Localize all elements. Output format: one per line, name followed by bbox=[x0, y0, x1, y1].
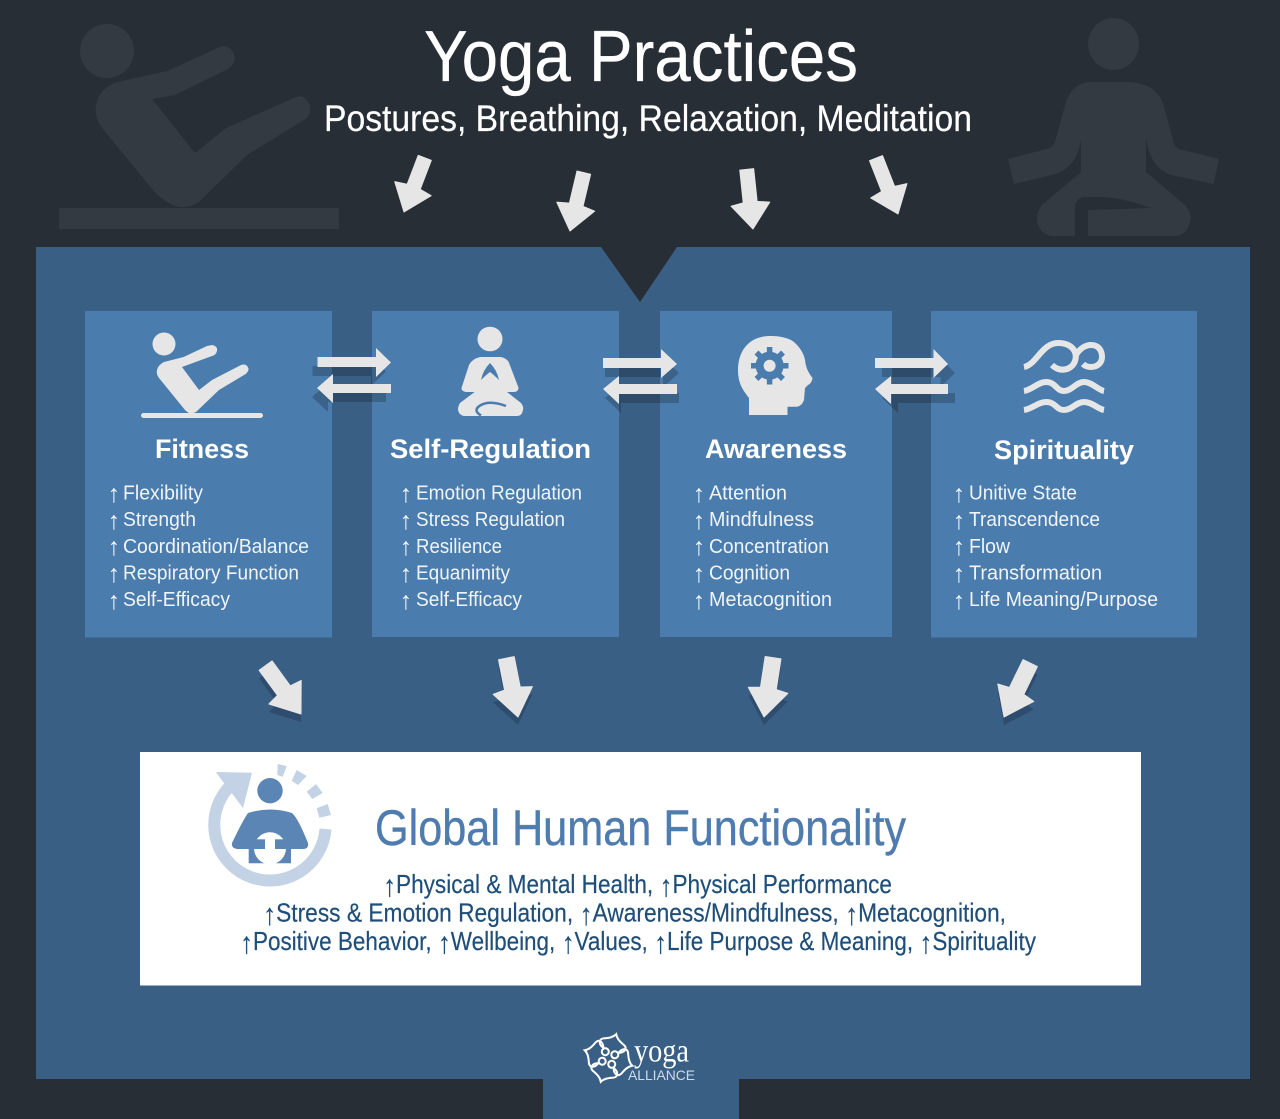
list: Awareness outcomes: ↑ bbox=[693, 507, 705, 535]
heading: Self-Regulation: Self-Regulation bbox=[390, 434, 591, 464]
title: Yoga Practices bbox=[424, 17, 858, 97]
list: Self-Regulation outcomes: ↑ bbox=[400, 533, 412, 561]
list: Spirituality outcomes: Transcendence bbox=[969, 509, 1100, 531]
list: Awareness outcomes: Cognition bbox=[709, 562, 790, 584]
icon: logo flower bbox=[577, 1026, 640, 1090]
list: Self-Regulation outcomes: ↑ bbox=[400, 507, 412, 535]
text: outcomes line 3: Wellbeing, bbox=[451, 926, 562, 956]
list: Awareness outcomes: ↑ bbox=[693, 480, 705, 508]
text: outcomes line 2: ↑ bbox=[845, 898, 858, 932]
list: Spirituality outcomes: ↑ bbox=[953, 480, 965, 508]
double arrow: Fitness and Self-Regulation bbox=[312, 348, 391, 412]
heading: Spirituality: Spirituality bbox=[994, 435, 1134, 465]
text: outcomes line 3: ↑ bbox=[240, 927, 253, 960]
list: Fitness outcomes: ↑ bbox=[108, 587, 120, 615]
icon: background boat pose figure bbox=[59, 24, 339, 229]
list: Fitness outcomes: Flexibility bbox=[123, 482, 203, 504]
panel: Fitness bbox=[85, 311, 332, 638]
list: Spirituality outcomes: Transformation bbox=[969, 562, 1102, 584]
list: Spirituality outcomes: Flow bbox=[969, 536, 1011, 558]
panel: Awareness bbox=[660, 311, 892, 637]
list: Spirituality outcomes: ↑ bbox=[953, 560, 965, 588]
list: Fitness outcomes bbox=[108, 480, 309, 615]
list: Spirituality outcomes: ↑ bbox=[953, 507, 965, 535]
list: Spirituality outcomes: ↑ bbox=[953, 533, 965, 561]
heading: Global Human Functionality: Global Human Functionality bbox=[375, 800, 906, 856]
list: Fitness outcomes: ↑ bbox=[108, 560, 120, 588]
icon: waves and swirl bbox=[1024, 343, 1104, 410]
logo: Yoga Alliance bbox=[577, 1026, 695, 1090]
list: Self-Regulation outcomes: ↑ bbox=[400, 480, 412, 508]
list: Fitness outcomes: ↑ bbox=[108, 507, 120, 535]
list: Awareness outcomes: Metacognition bbox=[709, 589, 832, 611]
main blue panel bbox=[36, 247, 1250, 1119]
list: Spirituality outcomes: Unitive State bbox=[969, 482, 1077, 504]
text: outcomes line 2: ↑ bbox=[579, 898, 593, 932]
text: outcomes line 3: ↑ bbox=[562, 927, 575, 960]
list: Self-Regulation outcomes: Emotion Regulation bbox=[416, 482, 582, 504]
heading: Awareness: Awareness bbox=[705, 434, 847, 464]
text: yoga: yoga bbox=[634, 1034, 689, 1070]
list: Fitness outcomes: Coordination/Balance bbox=[123, 536, 309, 558]
list: Self-Regulation outcomes bbox=[400, 480, 582, 615]
list: Awareness outcomes: ↑ bbox=[693, 533, 705, 561]
list: Self-Regulation outcomes: Equanimity bbox=[416, 562, 510, 584]
list: Spirituality outcomes bbox=[953, 480, 1158, 615]
list: Awareness outcomes: ↑ bbox=[693, 560, 705, 588]
text: outcomes line 3: Spirituality bbox=[932, 926, 1036, 956]
subtitle: Postures, Breathing, Relaxation, Meditation bbox=[324, 98, 972, 139]
panel: Self-Regulation bbox=[372, 311, 619, 637]
text: outcomes line 1: Physical Performance bbox=[672, 869, 892, 899]
text: outcomes line 2: Awareness/Mindfulness, bbox=[593, 898, 845, 928]
panel: Spirituality bbox=[931, 311, 1197, 638]
text: outcomes line 3: ↑ bbox=[438, 927, 451, 960]
icon: background meditation figure bbox=[1008, 18, 1219, 236]
text: outcomes line 3: Life Purpose & Meaning, bbox=[667, 926, 919, 956]
list: Awareness outcomes bbox=[693, 480, 832, 615]
list: Self-Regulation outcomes: ↑ bbox=[400, 560, 412, 588]
heading: Fitness: Fitness bbox=[155, 434, 249, 464]
list: Awareness outcomes: ↑ bbox=[693, 587, 705, 615]
list: Awareness outcomes: Attention bbox=[709, 482, 787, 504]
text: outcomes line 2: Metacognition, bbox=[858, 898, 1006, 928]
text: outcomes line 1: Physical & Mental Health, bbox=[396, 869, 659, 899]
icon: person in cycle bbox=[214, 764, 331, 881]
text: outcomes line 1: ↑ bbox=[659, 870, 672, 903]
icon: head with gear bbox=[738, 336, 812, 415]
list: Self-Regulation outcomes: Resilience bbox=[416, 536, 502, 558]
icon: boat pose bbox=[141, 332, 263, 418]
list: Self-Regulation outcomes: Self-Efficacy bbox=[416, 589, 522, 611]
text: outcomes line 2: ↑ bbox=[263, 898, 276, 932]
list: Fitness outcomes: Respiratory Function bbox=[123, 562, 299, 584]
list: Fitness outcomes: ↑ bbox=[108, 533, 120, 561]
text: outcomes line 3: ↑ bbox=[654, 927, 667, 960]
text: alliance: ALLIANCE bbox=[628, 1067, 695, 1083]
list: Fitness outcomes: ↑ bbox=[108, 480, 120, 508]
list: Spirituality outcomes: ↑ bbox=[953, 587, 965, 615]
text: outcomes line 1: ↑ bbox=[383, 870, 396, 903]
list: Self-Regulation outcomes: ↑ bbox=[400, 587, 412, 615]
list: Awareness outcomes: Concentration bbox=[709, 536, 829, 558]
text: outcomes line 3: ↑ bbox=[919, 927, 932, 960]
text: outcomes line 2: Stress & Emotion Regulation, bbox=[276, 898, 579, 928]
arrows: domains to global functionality bbox=[249, 654, 1048, 734]
list: Awareness outcomes: Mindfulness bbox=[709, 509, 814, 531]
list: Spirituality outcomes: Life Meaning/Purpose bbox=[969, 589, 1158, 611]
list: Fitness outcomes: Strength bbox=[123, 509, 196, 531]
panel: Global Human Functionality bbox=[140, 752, 1141, 986]
list: Self-Regulation outcomes: Stress Regulation bbox=[416, 509, 565, 531]
double arrow: Awareness and Spirituality bbox=[875, 349, 955, 413]
list: Fitness outcomes: Self-Efficacy bbox=[123, 589, 230, 611]
text: outcomes line 3: Values, bbox=[575, 926, 654, 956]
icon: meditating figure bbox=[458, 327, 523, 416]
text: outcomes line 3: Positive Behavior, bbox=[253, 926, 438, 956]
arrows: practices into panel bbox=[386, 151, 916, 235]
double arrow: Self-Regulation and Awareness bbox=[603, 349, 679, 413]
